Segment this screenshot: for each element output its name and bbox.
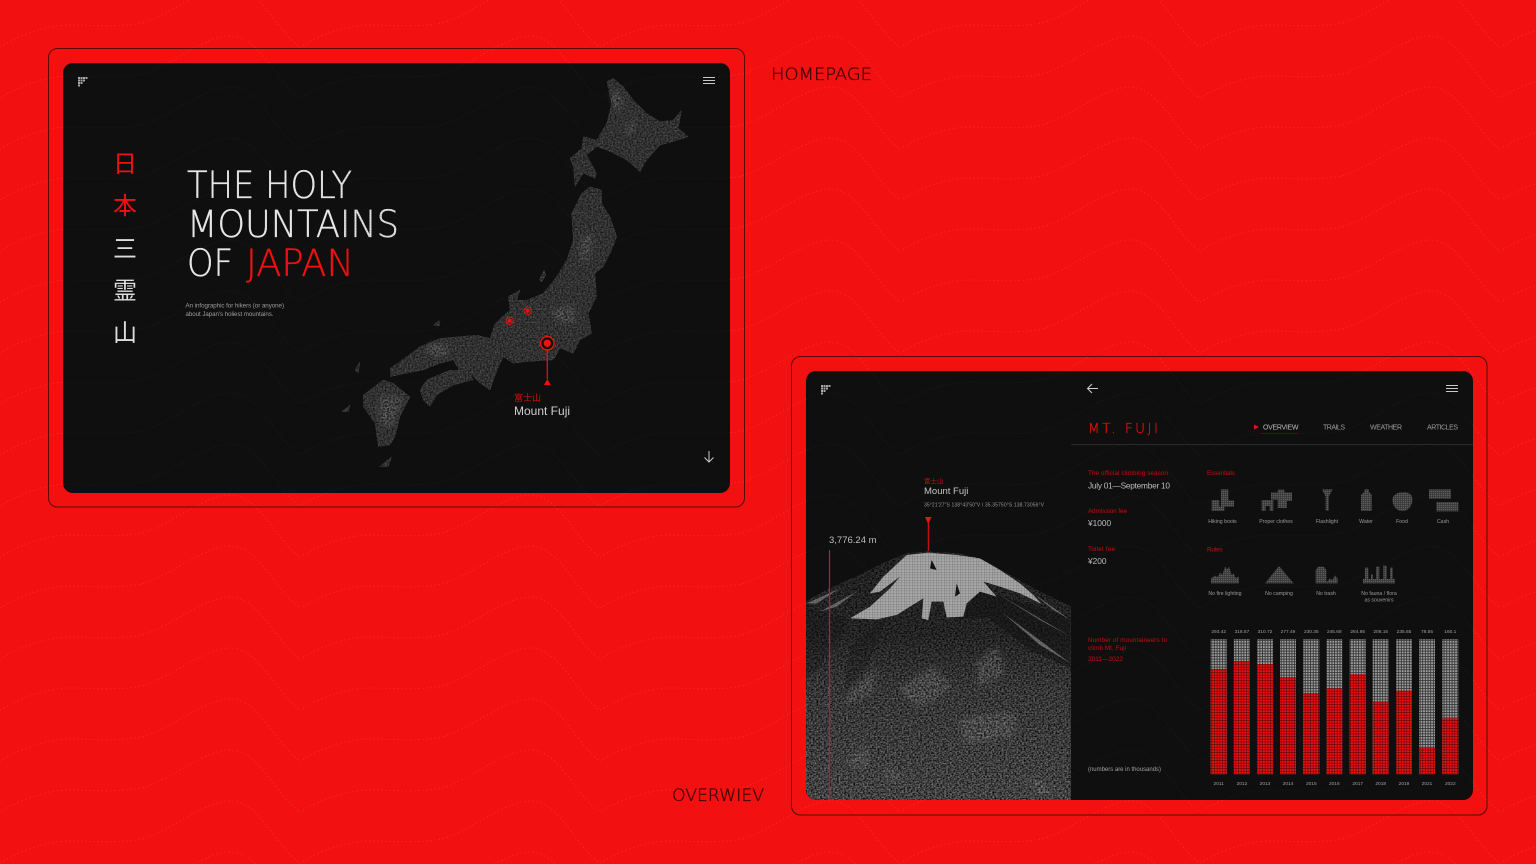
navigation tabs: [1254, 424, 1458, 434]
bar chart: mountaineers per year: 277.49: [1281, 629, 1296, 635]
info: climbing season and fees: The official climbing season: [1088, 470, 1168, 477]
bar chart: mountaineers per year: 293.42: [1211, 629, 1226, 635]
essentials labels: Water: [1359, 519, 1373, 525]
bar chart: mountaineers per year: 160.1: [1444, 629, 1457, 635]
bar chart: mountaineers per year: 2014: [1283, 781, 1294, 787]
map label: mount fuji: 富士山: [514, 391, 541, 404]
info: climbing season and fees: Admission fee: [1088, 508, 1127, 515]
summit label: [924, 475, 1045, 508]
vertical japanese title: 日: [113, 144, 137, 179]
subtitle: An infographic for hikers (or anyone): [186, 302, 284, 310]
bar chart: mountaineers per year: 235.65: [1397, 629, 1412, 635]
info: climbing season and fees: ¥1000: [1087, 518, 1111, 528]
essentials icons: [1212, 489, 1458, 511]
bar chart: mountaineers per year: 2022: [1445, 781, 1456, 787]
icon: menu: [703, 78, 715, 84]
heading: homepage: HOMEPAGE: [771, 65, 872, 84]
navigation tabs: OVERVIEW: [1263, 424, 1299, 432]
heading: overview: OVERWIEV: [672, 786, 764, 805]
subtitle: about Japan's holiest mountains.: [186, 311, 274, 318]
map label: mount fuji: [514, 391, 570, 418]
bar chart: mountaineers per year: 2012: [1237, 781, 1248, 787]
bar chart: mountaineers per year: 245.68: [1327, 629, 1342, 635]
essentials: [1207, 470, 1458, 525]
icon: logo: [78, 77, 88, 86]
essentials labels: [1208, 519, 1449, 525]
rules labels: No camping: [1265, 591, 1293, 597]
chart note: (numbers are in thousands): [1088, 767, 1161, 773]
height line: 3,776.24 m: [829, 535, 877, 546]
map marker: minor mountains: [506, 307, 531, 324]
navigation tabs: ARTICLES: [1427, 424, 1458, 432]
chart note: climb Mt. Fuji: [1088, 645, 1126, 652]
vertical japanese title: 三: [113, 229, 137, 264]
chart note: 2011—2022: [1088, 656, 1123, 663]
chart note: Number of mountaineers to: [1088, 637, 1167, 644]
panel: overview frame: [792, 356, 1487, 815]
rules labels: as souvenirs: [1364, 598, 1394, 604]
title: MOUNTAINS: [187, 203, 399, 246]
essentials labels: Cash: [1437, 519, 1449, 525]
heading: mt fuji: MT. FUJI: [1088, 421, 1158, 437]
rules labels: No fire lighting: [1208, 591, 1242, 597]
bar chart: mountaineers per year: 2013: [1260, 781, 1271, 787]
bar chart: mountaineers per year: 284.86: [1350, 629, 1365, 635]
bar chart: mountaineers per year: 318.57: [1235, 629, 1250, 635]
info: climbing season and fees: July 01—September 10: [1088, 480, 1170, 490]
essentials labels: Hiking boots: [1208, 519, 1237, 525]
bar chart: mountaineers per year: 2017: [1352, 781, 1363, 787]
map marker: mount fuji: [541, 337, 554, 385]
summit label: Mount Fuji: [924, 486, 968, 497]
summit label: 富士山: [924, 475, 944, 485]
summit marker: [925, 517, 932, 551]
rules labels: No fauna / flora: [1361, 591, 1397, 597]
bar chart: mountaineers per year: 78.55: [1421, 629, 1433, 635]
title: JAPAN: [246, 242, 354, 285]
vertical japanese title: 本: [113, 186, 137, 221]
bar chart: mountaineers per year: 2016: [1329, 781, 1340, 787]
vertical japanese title: [113, 144, 137, 348]
title: OF: [187, 242, 233, 285]
info: climbing season and fees: [1087, 470, 1170, 566]
panel: homepage frame: [48, 48, 744, 507]
map of japan: [340, 77, 690, 470]
bar chart: mountaineers per year: 2018: [1375, 781, 1386, 787]
rules labels: No trash: [1316, 591, 1336, 597]
icon: logo: [821, 385, 830, 394]
icon: scroll down arrow: [704, 451, 714, 462]
rules: Rules: [1207, 546, 1222, 554]
rules icons: [1211, 566, 1395, 583]
essentials labels: Proper clothes: [1259, 519, 1293, 525]
bar chart: mountaineers per year: 2015: [1306, 781, 1317, 787]
essentials labels: Food: [1396, 519, 1408, 525]
navigation tabs: WEATHER: [1370, 424, 1402, 432]
info: climbing season and fees: Toilet fee: [1088, 546, 1115, 553]
vertical japanese title: 山: [113, 313, 137, 348]
bar chart: mountaineers per year: 2019: [1399, 781, 1410, 787]
bar chart: mountaineers per year: 2011: [1214, 781, 1224, 787]
map label: mount fuji: Mount Fuji: [514, 404, 570, 418]
bar chart: mountaineers per year: [1211, 629, 1458, 787]
image: mount fuji: [806, 550, 1071, 801]
info: climbing season and fees: ¥200: [1087, 556, 1107, 566]
title: [187, 164, 399, 285]
rules: [1207, 546, 1397, 604]
bar chart: mountaineers per year: 230.35: [1304, 629, 1319, 635]
summit label: 35°21'27"S 138°43'50"V / 35.35750°S 138.73056°V: [924, 502, 1045, 508]
essentials: Essentials: [1207, 470, 1235, 477]
bar chart: mountaineers per year: 2021: [1422, 781, 1433, 787]
bar chart: mountaineers per year: 208.16: [1373, 629, 1388, 635]
vertical japanese title: 霊: [113, 271, 137, 306]
essentials labels: Flashlight: [1316, 519, 1339, 525]
chart note: [1088, 637, 1167, 773]
subtitle: [186, 302, 284, 318]
bar chart: mountaineers per year: 310.72: [1258, 629, 1273, 635]
rules labels: [1208, 591, 1397, 604]
icon: back arrow: [1088, 384, 1098, 393]
title: THE HOLY: [187, 164, 352, 207]
navigation tabs: TRAILS: [1323, 424, 1345, 432]
icon: menu: [1446, 386, 1458, 392]
